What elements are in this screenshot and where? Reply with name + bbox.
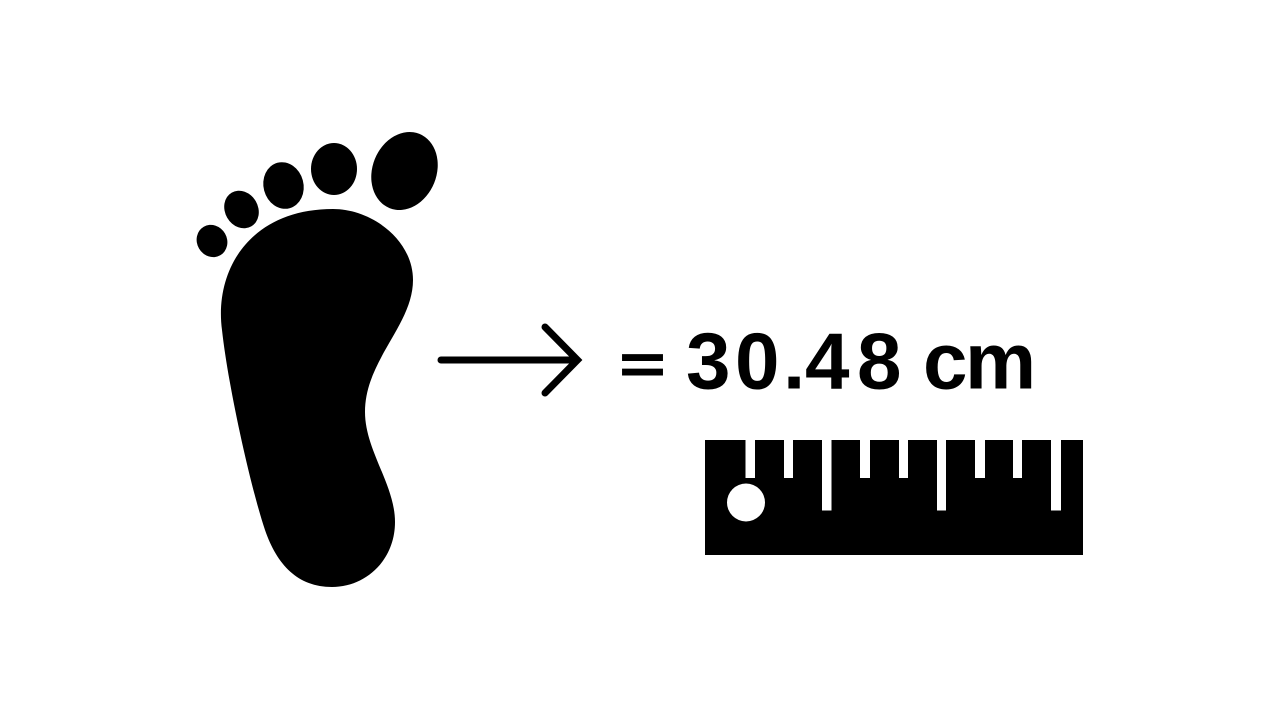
- equation text: 30.48cm: [686, 316, 1036, 406]
- icon: ruler: [705, 438, 1083, 555]
- icon: foot: [191, 122, 449, 587]
- arrow: [441, 327, 578, 393]
- equation text: =: [620, 334, 666, 394]
